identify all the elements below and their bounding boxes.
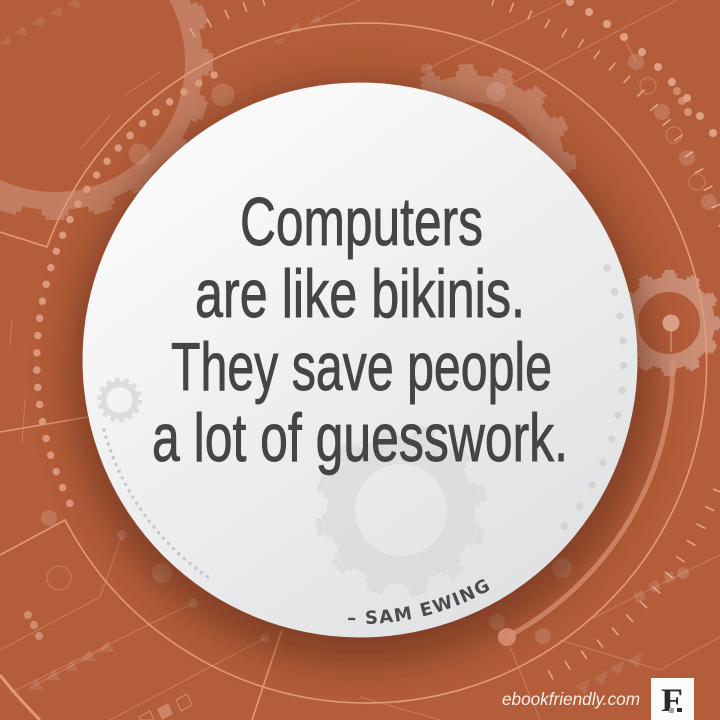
- logo: F: [661, 683, 683, 719]
- translucent nodes: [41, 54, 717, 644]
- white disc: [82, 82, 638, 638]
- gear: top right: [365, 61, 579, 275]
- thick arc with end dot: [498, 314, 680, 646]
- small dots lower left: [24, 611, 43, 640]
- disc dots: lower left: [104, 430, 212, 580]
- quote line 1: Computers: [240, 184, 483, 260]
- disc gear: small: [99, 380, 140, 420]
- ring spoke and side line: [0, 417, 282, 720]
- quote line 4: a lot of guesswork.: [152, 400, 568, 476]
- gear: top left: [0, 0, 210, 217]
- circle shadow: [72, 84, 652, 664]
- logo: [651, 678, 694, 720]
- bottom-left thick arc: [0, 675, 40, 720]
- attribution text: – SAM EWING: [348, 579, 490, 624]
- disc dots: right: [564, 268, 624, 527]
- small squares: [139, 571, 676, 720]
- outlined rings: [47, 78, 705, 590]
- dotted arc: left: [37, 75, 214, 515]
- quote line 3: They save people: [171, 329, 552, 405]
- attribution path: [347, 562, 530, 624]
- disc gear: large: [296, 405, 506, 615]
- gear: right: [618, 272, 720, 374]
- quote: [152, 184, 568, 476]
- top right dots: [566, 0, 717, 137]
- radial tick marks: [192, 0, 720, 678]
- site name: ebookfriendly.com: [502, 689, 640, 709]
- quote line 2: are like bikinis.: [195, 256, 525, 332]
